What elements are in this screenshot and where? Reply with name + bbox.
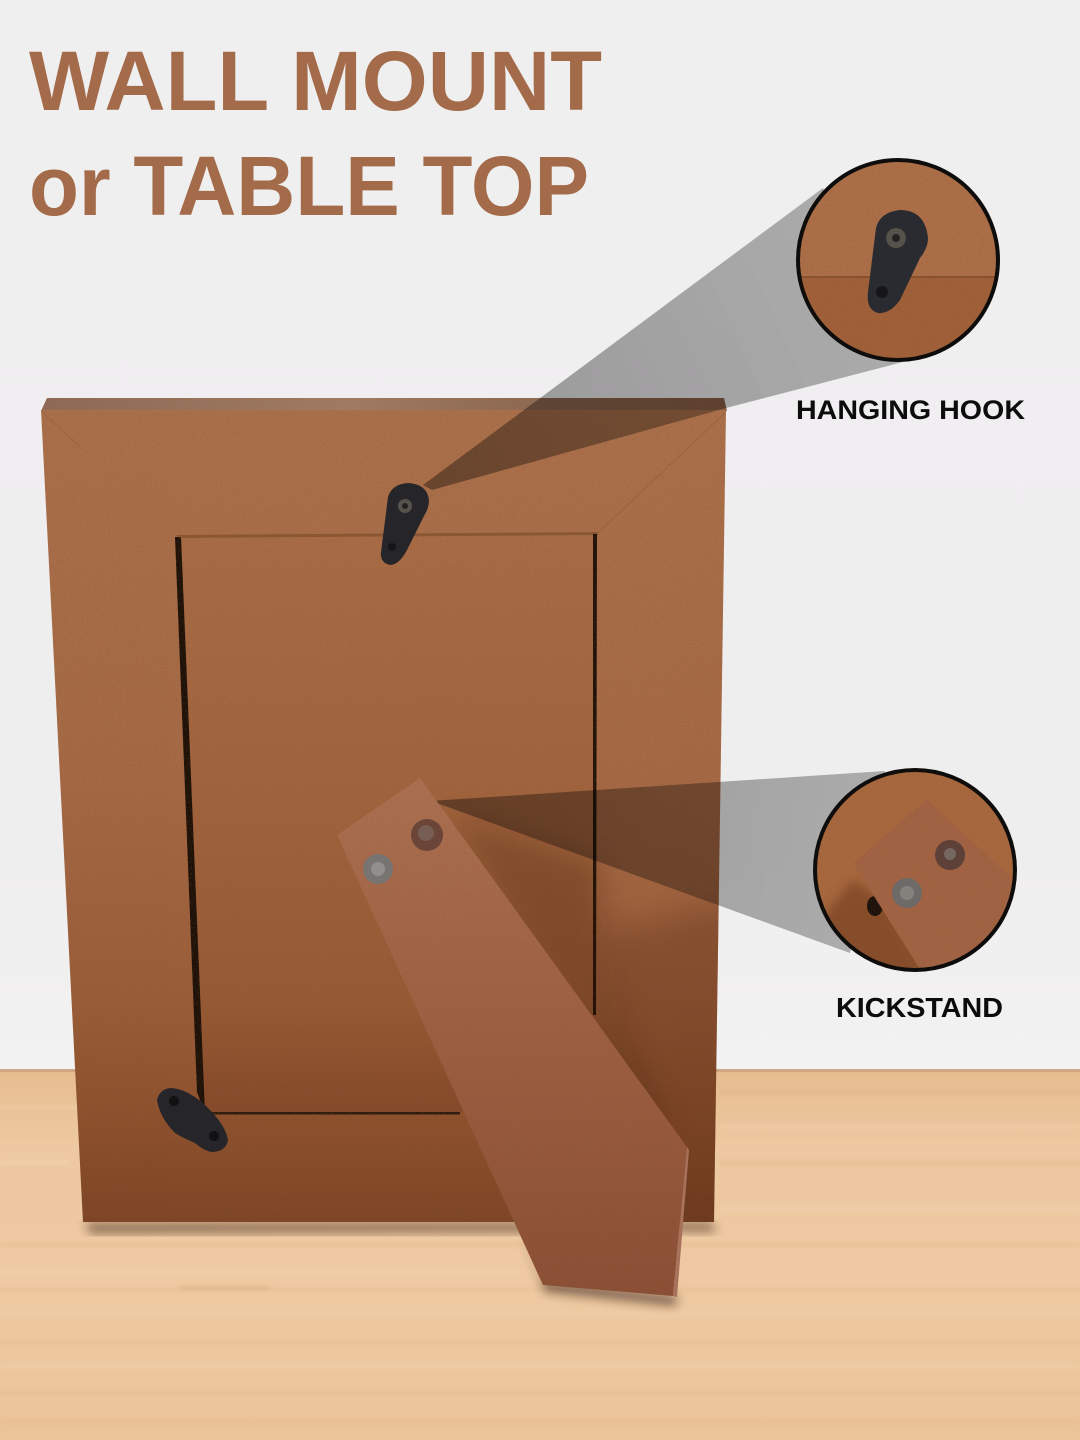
photo frame back	[40, 398, 740, 1240]
corner bracket	[157, 1088, 228, 1152]
wooden floor	[0, 1069, 1080, 1440]
wall background	[0, 0, 1080, 1070]
callout beam: hanging hook	[423, 188, 903, 490]
callout beam: kickstand	[430, 771, 885, 953]
label: kickstand: KICKSTAND	[836, 992, 1003, 1023]
callout circle: hanging hook	[790, 155, 1010, 367]
title: WALL MOUNT	[29, 34, 602, 128]
kickstand	[330, 770, 695, 1306]
mitre seams	[42, 412, 726, 1220]
title	[29, 34, 602, 233]
title: or TABLE TOP	[29, 139, 589, 233]
callout circle: kickstand	[813, 768, 1017, 972]
kickstand rivets	[363, 819, 443, 884]
stand shadow on frame	[458, 818, 655, 1102]
label: hanging hook: HANGING HOOK	[796, 395, 1026, 425]
frame grain	[40, 400, 740, 1240]
hanging hook plate	[381, 483, 429, 565]
recessed backing panel	[175, 532, 598, 1114]
